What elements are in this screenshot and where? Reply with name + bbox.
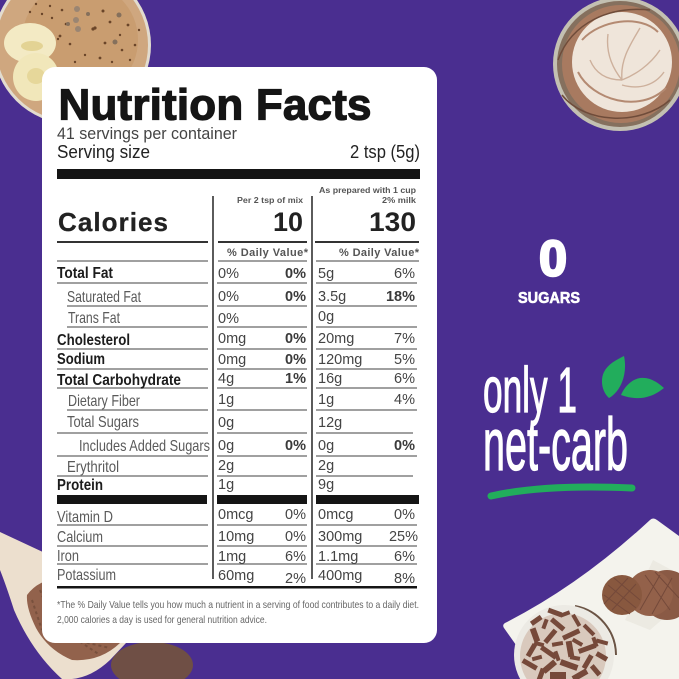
row: total fat: 5g [318,266,334,282]
callout: only 1 net-carb [483,354,628,486]
row: sodium [57,351,415,368]
footnote [57,599,419,626]
row: includes added sugars: 0g [318,438,334,454]
row: vitamin d: 0mcg [318,507,353,523]
row: includes added sugars: 0% [285,438,306,454]
row: total fat: 6% [394,266,415,282]
daily value headers: % Daily Value* [227,247,309,259]
row: includes added sugars: 0% [394,438,415,454]
row: calcium [57,529,418,546]
green underline [491,487,632,496]
photo: banana smoothie glass [0,0,151,124]
row: sodium: 0mg [218,352,246,368]
row: dietary fiber: 1g [218,392,234,408]
row: total sugars: Total Sugars [67,414,139,431]
row: iron: 1mg [218,549,246,565]
row: trans fat: 0g [318,309,334,325]
photo: latte cup [553,0,679,131]
daily value headers [227,247,420,259]
row: calcium: Calcium [57,529,103,546]
row: trans fat: Trans Fat [68,310,120,327]
serving size: Serving size [57,142,150,162]
row: cholesterol: 0mg [218,331,246,347]
row: vitamin d: Vitamin D [57,509,113,526]
row: potassium: Potassium [57,567,116,584]
row: potassium: 8% [394,571,415,587]
row: dietary fiber: Dietary Fiber [68,393,141,410]
row: total carbohydrate: 16g [318,371,342,387]
row: protein: 9g [318,477,334,493]
callout: only 1 net-carb: only 1 [483,354,577,426]
column dividers [213,196,312,579]
row: protein [57,477,334,494]
row: includes added sugars: 0g [218,438,234,454]
row: total carbohydrate: 6% [394,371,415,387]
row: total fat: Total Fat [57,265,114,282]
row: erythritol: Erythritol [67,459,119,476]
row: saturated fat: 18% [386,289,415,305]
row: cholesterol: 7% [394,331,415,347]
row: erythritol: 2g [318,458,334,474]
footnote: *The % Daily Value tells you how much a nutrient in a serving of food contributes to a daily diet. [57,599,419,611]
column header: per 2 tsp of mix: Per 2 tsp of mix [237,196,304,205]
row: total sugars [67,414,342,431]
row: vitamin d: 0% [394,507,415,523]
row: potassium: 2% [285,571,306,587]
row: cholesterol: 0% [285,331,306,347]
row: potassium [57,567,415,587]
row: cholesterol [57,331,415,349]
callout: 0 sugars: SUGARS [518,290,580,307]
row: cholesterol: Cholesterol [57,332,130,349]
row: total carbohydrate: Total Carbohydrate [57,372,181,389]
row: saturated fat: 3.5g [318,289,346,305]
serving size [57,142,420,162]
row: sodium: Sodium [57,351,105,368]
row: includes added sugars [79,438,415,455]
row: iron [57,548,415,565]
row: erythritol [67,458,334,476]
row: cholesterol: 20mg [318,331,354,347]
title: Nutrition Facts [58,80,372,130]
row: iron: 1.1mg [318,549,358,565]
column header: per 2 tsp of mix: 10 [273,207,303,237]
column header: as prepared with milk [319,186,417,237]
nutrition facts card [42,67,437,643]
row: saturated fat: 0% [285,289,306,305]
column header: as prepared with milk: 130 [369,207,416,237]
row: sodium: 5% [394,352,415,368]
row: potassium: 400mg [318,568,362,584]
row: total carbohydrate: 4g [218,371,234,387]
servings per container: 41 servings per container [57,125,237,143]
row: trans fat [68,309,334,327]
row: iron: 6% [285,549,306,565]
row: total sugars: 0g [218,415,234,431]
footnote: 2,000 calories a day is used for general nutrition advice. [57,614,267,626]
row: total fat [57,265,415,282]
row: calcium: 10mg [218,529,254,545]
row: erythritol: 2g [218,458,234,474]
row: dietary fiber [68,392,415,410]
daily value headers: % Daily Value* [339,247,420,259]
row: saturated fat: Saturated Fat [67,289,141,306]
row: iron: 6% [394,549,415,565]
column header: as prepared with milk: 2% milk [382,196,417,205]
photo: plate with cookies and chocolate dessert [503,518,679,679]
column header: as prepared with milk: As prepared with 1 cup [319,186,416,195]
row: calcium: 300mg [318,529,362,545]
callout: 0 sugars: 0 [539,230,567,286]
row: total sugars: 12g [318,415,342,431]
row: saturated fat [67,289,415,306]
row: iron: Iron [57,548,79,565]
row: calcium: 0% [285,529,306,545]
row: sodium: 0% [285,352,306,368]
row: protein: Protein [57,477,103,494]
row: potassium: 60mg [218,568,254,584]
row: total carbohydrate [57,371,415,389]
row: dietary fiber: 1g [318,392,334,408]
row: vitamin d: 0mcg [218,507,253,523]
row: total fat: 0% [285,266,306,282]
calories label: Calories [58,207,168,237]
row: saturated fat: 0% [218,289,239,305]
cookies [602,570,679,620]
callout: 0 sugars [518,230,580,307]
column header: per 2 tsp of mix [237,196,304,237]
thick divider bar [57,495,419,504]
row: trans fat: 0% [218,311,239,327]
row: vitamin d [57,507,415,526]
row: calcium: 25% [389,529,418,545]
row: protein: 1g [218,477,234,493]
serving size: 2 tsp (5g) [350,142,420,162]
row: includes added sugars: Includes Added Sugars [79,438,210,455]
dessert glass [514,605,616,679]
photo: spoon with cocoa powder [0,532,193,679]
row: total carbohydrate: 1% [285,371,306,387]
row: vitamin d: 0% [285,507,306,523]
row: sodium: 120mg [318,352,362,368]
row: dietary fiber: 4% [394,392,415,408]
row: total fat: 0% [218,266,239,282]
icon: green leaves [602,356,664,398]
